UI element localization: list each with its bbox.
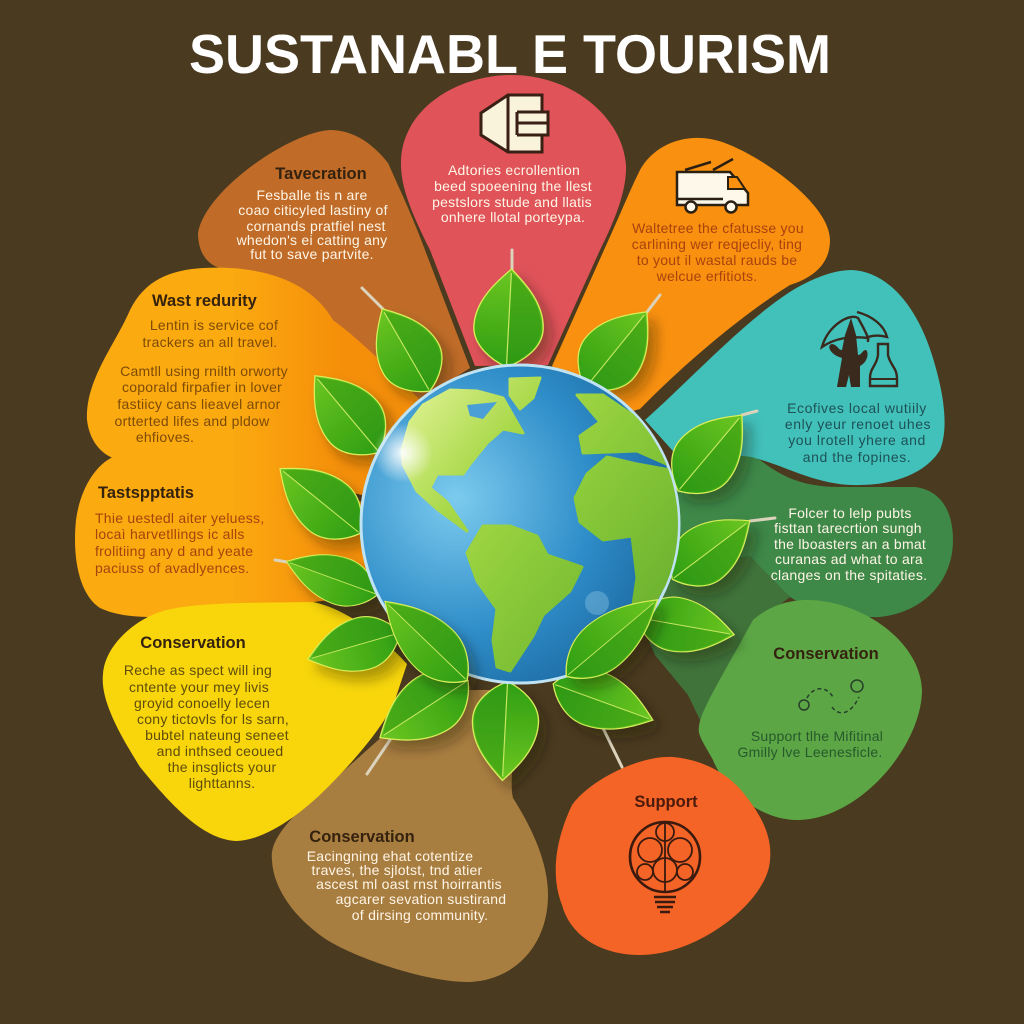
teal petal text: enly yeur renoet uhes: [785, 416, 931, 432]
front leaves: [367, 581, 674, 700]
tan petal text: of dirsing community.: [352, 907, 488, 923]
icon: building block: [481, 95, 548, 152]
yellow petal text: groyid conoelly lecen: [134, 695, 270, 711]
lens flare: [585, 591, 609, 615]
rust petal text: coao citicyled lastiny of: [238, 202, 388, 218]
yellow petal text: bubtel nateung seneet: [145, 727, 289, 743]
panel: tan conservation petal: [272, 690, 548, 982]
yellow petal text: lighttanns.: [189, 775, 255, 791]
title: SUSTANABL E TOURISM: [189, 23, 831, 85]
panel: orange top right petal: [552, 138, 830, 420]
wast reduction text: Lentin is service cof: [150, 317, 278, 333]
icon: figure with umbrella and flask: [822, 312, 897, 387]
rust petal text: [236, 165, 388, 262]
rust petal text: fut to save partvite.: [250, 246, 374, 262]
panel: olive shadow wedge: [640, 556, 790, 720]
tastspptatis text: frolitiing any d and yeate: [95, 543, 253, 559]
green petal text: [737, 728, 883, 760]
tan petal text: Eacingning ehat cotentize: [307, 848, 473, 864]
green petal text: Gmilly lve Leenesficle.: [737, 744, 883, 760]
back leaves: [261, 267, 767, 782]
panel: green conservation petal: [699, 600, 922, 820]
panel: orange support petal: [556, 757, 770, 955]
yellow petal text: cony tictovls for ls sarn,: [137, 711, 289, 727]
tastspptatis text: Tastspptatis: [98, 484, 194, 502]
wast reduction text: fastiicy cans lieavel arnor: [117, 396, 281, 412]
icon: route: [799, 680, 863, 713]
red petal text: onhere llotal porteypa.: [441, 209, 585, 225]
red petal text: [432, 162, 592, 225]
dark green petal text: clanges on the spitaties.: [771, 567, 927, 583]
icon: globe bulb: [630, 822, 700, 912]
dark green petal text: Folcer to lelp pubts: [788, 505, 912, 521]
yellow petal text: Conservation: [140, 634, 246, 652]
dark green petal text: the lboasters an a bmat: [774, 536, 926, 552]
yellow petal text: [124, 634, 289, 791]
rust petal text: cornands pratfiel nest: [246, 218, 386, 234]
panel: orange tastspptatis petal: [75, 457, 370, 617]
orange petal text: welcue erfitiots.: [656, 268, 757, 284]
panel: teal petal: [645, 270, 945, 485]
dark green petal text: [771, 505, 927, 583]
yellow petal text: Reche as spect will ing: [124, 662, 272, 678]
tastspptatis text: locaì harvetllings ic alls: [95, 526, 245, 542]
orange petal text: Waltetree the cfatusse you: [632, 220, 804, 236]
teal petal text: [785, 400, 931, 465]
yellow petal text: cntente your mey livis: [129, 679, 269, 695]
tastspptatis text: [95, 484, 264, 576]
tastspptatis text: paciuss of avadlyences.: [95, 560, 249, 576]
orange petal text: [632, 220, 804, 284]
teal petal text: and the fopines.: [803, 449, 911, 465]
globe highlight: [373, 423, 433, 483]
dark green petal text: fisttan tarecrtion sungh: [774, 520, 922, 536]
wast reduction text: Wast redurity: [152, 292, 258, 310]
green petal text: Support tlhe Mifitinal: [751, 728, 883, 744]
panel: red top petal: [401, 75, 626, 366]
yellow petal text: and inthsed ceoued: [157, 743, 283, 759]
orange petal text: carlining wer reqjecliy, ting: [632, 236, 802, 252]
red petal text: beed spoeening the llest: [434, 178, 592, 194]
yellow petal text: the insglicts your: [168, 759, 276, 775]
globe: [361, 365, 690, 683]
tan petal text: ascest ml oast rnst hoirrantis: [316, 876, 502, 892]
dark green petal text: curanas ad what to ara: [775, 551, 923, 567]
green petal heading: Conservation: [773, 645, 879, 663]
wast reduction text: ehfioves.: [136, 429, 194, 445]
wast reduction text: trackers an all travel.: [143, 334, 277, 350]
support heading: Support: [634, 793, 698, 811]
orange petal text: to yout il wastal rauds be: [637, 252, 797, 268]
rust petal text: whedon's ei catting any: [236, 232, 387, 248]
tastspptatis text: Thie uestedl aiter yeluess,: [95, 510, 264, 526]
panel: dark green petal: [675, 456, 953, 617]
rust petal text: Fesballe tis n are: [256, 187, 368, 203]
tan petal text: agcarer sevation sustirand: [336, 891, 506, 907]
panel: rust travel petal: [198, 130, 470, 400]
tan petal text: Conservation: [309, 828, 415, 846]
panel: yellow petal: [103, 602, 407, 841]
tan petal text: [307, 828, 506, 923]
red petal text: Adtories ecrollention: [448, 162, 580, 178]
icon: van: [677, 159, 748, 212]
leaf stems: [275, 250, 775, 774]
teal petal text: you lrotell yhere and: [788, 432, 926, 448]
rust petal text: Tavecration: [275, 165, 367, 183]
hudson bay: [467, 402, 497, 419]
wast reduction text: coporald firpafier in lover: [122, 379, 282, 395]
tan petal text: traves, the sjlotst, tnd atier: [312, 862, 483, 878]
wast reduction text: Camtll using rnilth orworty: [120, 363, 288, 379]
red petal text: pestslors stude and llatis: [432, 194, 592, 210]
teal petal text: Ecofives local wutiily: [787, 400, 927, 416]
continents: [402, 378, 690, 671]
wast reduction text: ortterted lifes and pldow: [115, 413, 270, 429]
wast reduction text: [115, 292, 288, 445]
panel: orange wast reduction petal: [87, 268, 420, 500]
